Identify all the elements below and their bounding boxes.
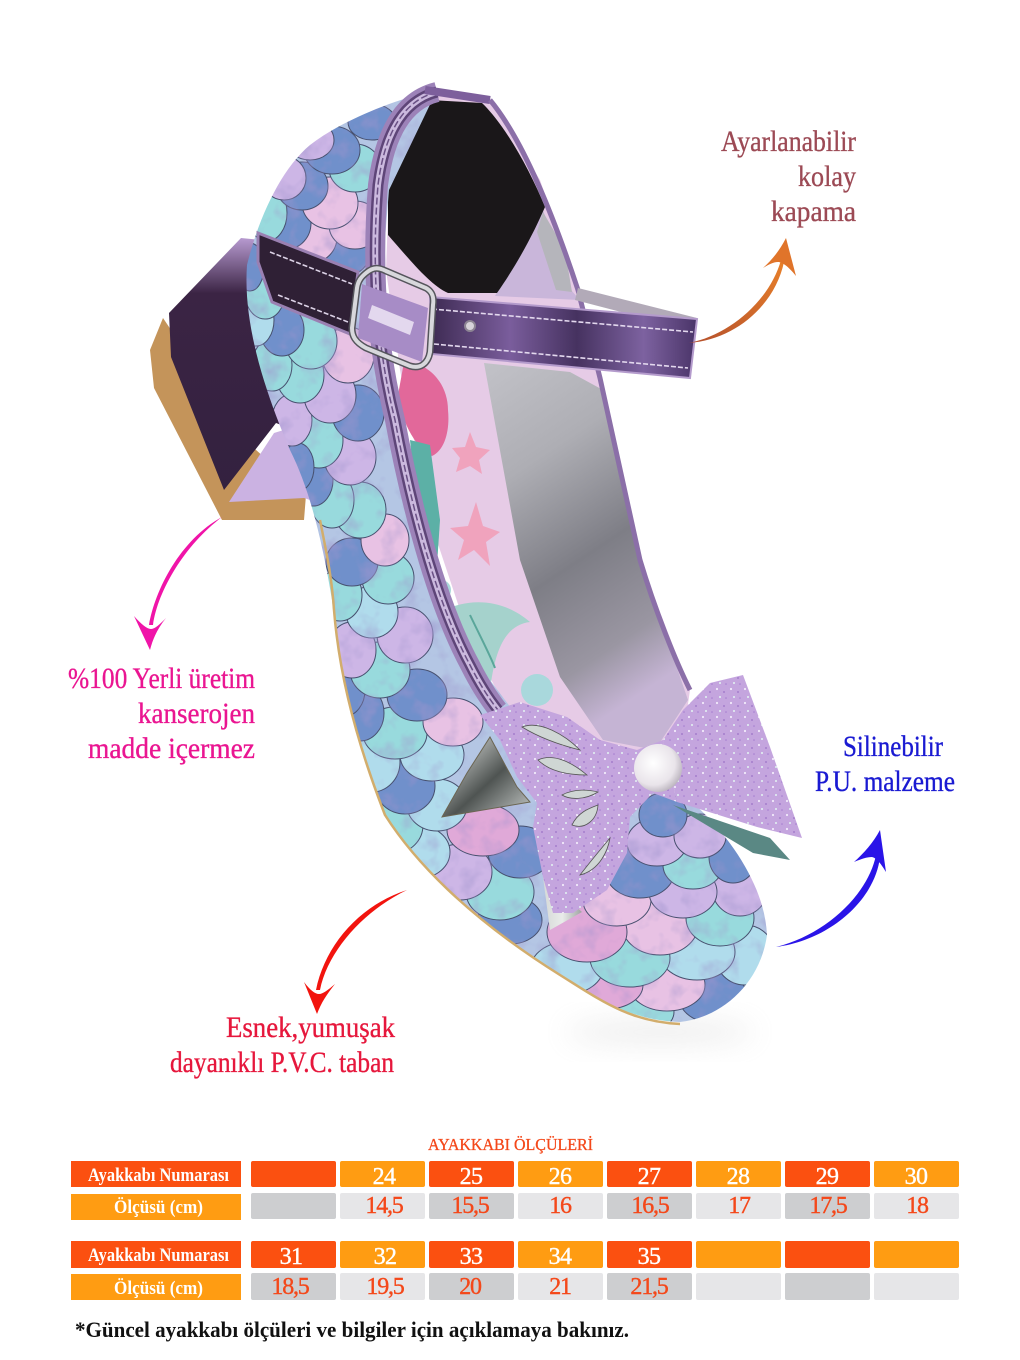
size table: row group one: 30 [905,1164,928,1190]
size table: row group one: 26 [549,1164,572,1190]
size table: row group two: 18,5 [271,1274,310,1300]
bow [442,675,802,930]
callout: wipeable material [815,730,955,798]
size table: row group one: 25 [460,1164,483,1190]
arrow: magenta to heel [134,517,222,650]
size table: row group one: 15,5 [451,1193,490,1219]
callout: local production: %100 Yerli üretim [68,662,255,695]
footnote: *Güncel ayakkabı ölçüleri ve bilgiler için açıklamaya bakınız. [75,1317,629,1342]
callout: closure: kolay [798,160,856,193]
arrow: blue to upper [776,830,886,947]
size table: row group one: 27 [638,1164,661,1190]
size table: row group two: 21 [549,1274,571,1300]
size table: row group two: 19,5 [366,1274,405,1300]
callout: sole [170,1011,395,1079]
callout: sole: Esnek,yumuşak [226,1011,395,1044]
size table: row group two: 31 [280,1244,302,1270]
size table: row group one: 17 [728,1193,751,1219]
size table: row group one: 17,5 [809,1193,848,1219]
size table: row group two: Ölçüsü (cm) [114,1278,203,1299]
table heading: AYAKKABI ÖLÇÜLERİ [428,1135,593,1154]
size table: row group one: 28 [727,1164,750,1190]
size table: row group one: Ayakkabı Numarası [88,1166,229,1186]
sole edge [320,520,680,1024]
arrow: orange to closure [689,238,796,343]
size table: row group one [71,1161,959,1220]
size table: row group two: 21,5 [630,1274,669,1300]
pearl [634,744,682,792]
size table: row group two: 35 [638,1244,661,1270]
mermaid print [398,362,553,706]
size table: row group two: Ayakkabı Numarası [88,1246,229,1266]
callout: local production [68,662,255,765]
size table: row group one: 24 [373,1164,396,1190]
callout: local production: madde içermez [88,732,255,765]
collar trim [375,90,690,710]
size table: row group one: 18 [906,1193,929,1219]
callout: closure: Ayarlanabilir [721,125,856,158]
ankle strap [258,233,697,378]
callout: wipeable material: P.U. malzeme [815,765,955,798]
arrow: red to sole [304,890,407,1014]
size table: row group two: 32 [374,1244,396,1270]
callout: local production: kanserojen [138,697,255,730]
size table: row group one: 16,5 [631,1193,670,1219]
size table: row group two: 20 [459,1274,482,1300]
floor shadow [565,1022,755,1042]
callout: sole: dayanıklı P.V.C. taban [170,1046,394,1079]
heel block [150,238,325,520]
size table: row group one: 16 [549,1193,572,1219]
upper with mermaid scales [236,85,780,1034]
callout: closure: kapama [771,195,856,228]
shoe illustration [150,85,802,1034]
interior lining [386,92,690,760]
size table: row group two: 33 [460,1244,483,1270]
callout: closure [721,125,856,228]
callout: wipeable material: Silinebilir [843,730,943,763]
size table: row group one: 29 [816,1164,839,1190]
size table: row group one: Ölçüsü (cm) [114,1197,203,1218]
size table: row group two [71,1241,959,1300]
size table: row group two: 34 [549,1244,572,1270]
buckle [352,268,433,367]
size table: row group one: 14,5 [365,1193,404,1219]
